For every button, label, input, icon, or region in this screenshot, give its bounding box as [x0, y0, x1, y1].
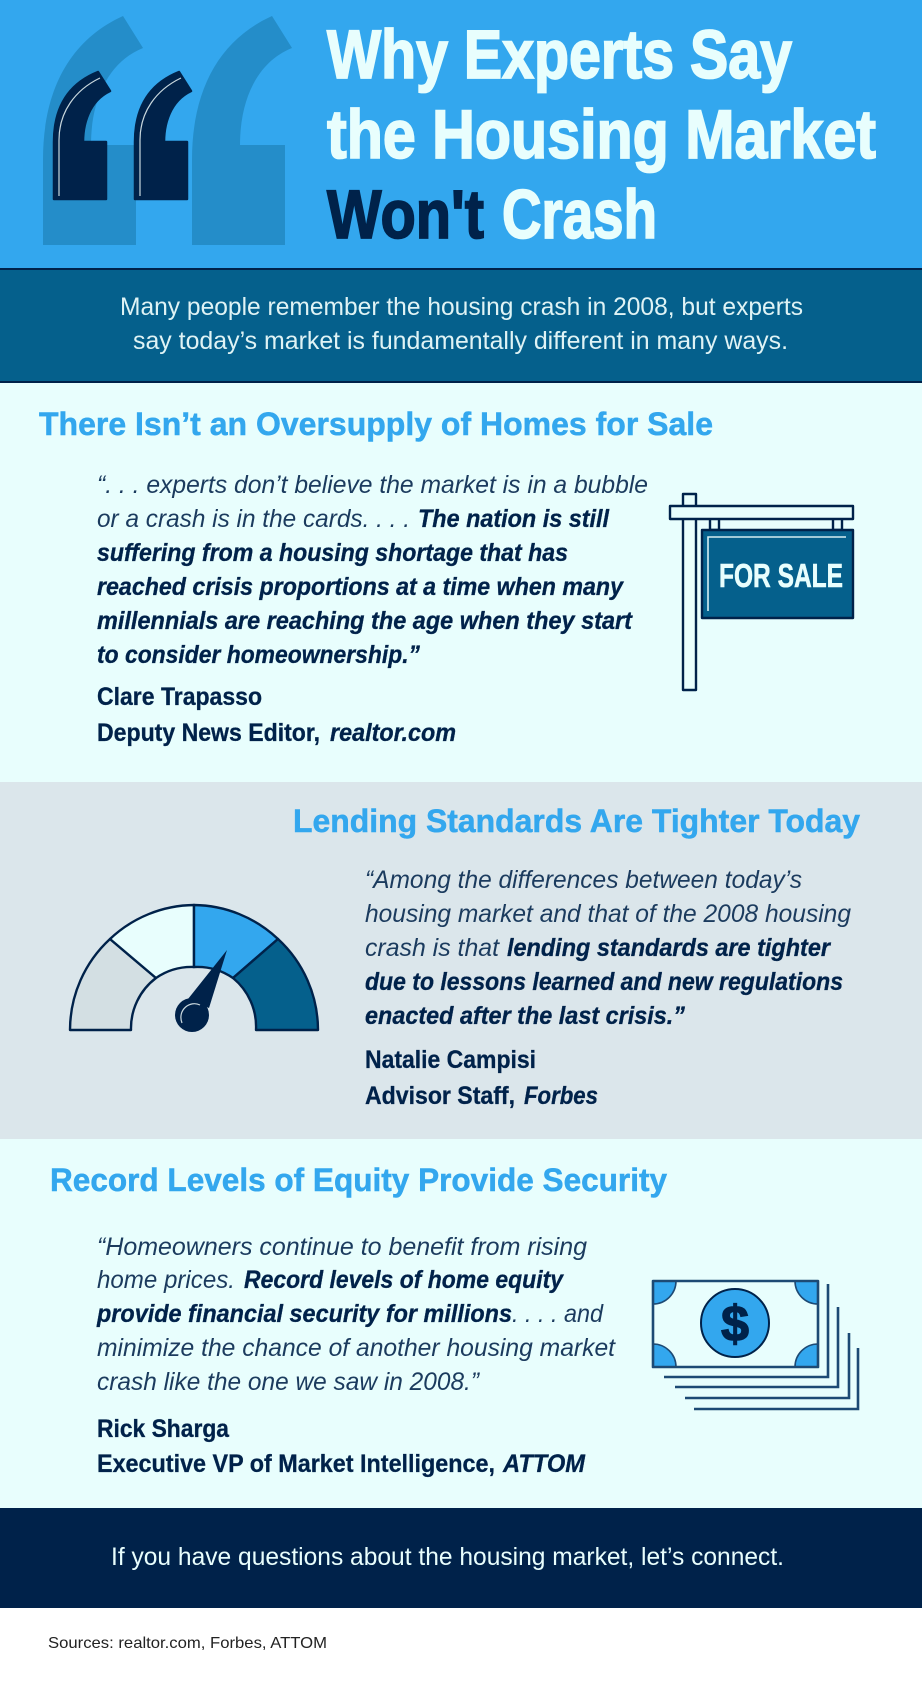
icon: gauge	[70, 905, 318, 1032]
quote: Clare Trapasso: to consider homeownership.”	[97, 641, 420, 669]
attribution: Clare Trapasso: realtor.com	[330, 719, 456, 747]
attribution: Natalie Campisi	[365, 1046, 598, 1110]
intro text	[120, 293, 803, 355]
title	[327, 16, 876, 253]
quote: Clare Trapasso: millennials are reaching the age when they start	[97, 607, 634, 635]
attribution: Natalie Campisi: Forbes	[524, 1082, 598, 1110]
icon: stack of money	[653, 1281, 858, 1409]
quote: Clare Trapasso	[97, 471, 648, 669]
attribution: Clare Trapasso: Deputy News Editor,	[97, 719, 320, 747]
attribution: Natalie Campisi: Advisor Staff,	[365, 1082, 515, 1110]
quote: Natalie Campisi: lending standards are tighter	[507, 934, 831, 962]
panel: footer call to action	[0, 1508, 922, 1608]
title: Crash	[502, 176, 657, 253]
intro text: say today’s market is fundamentally different in many ways.	[133, 327, 788, 355]
panel: intro band	[0, 268, 922, 383]
attribution: Rick Sharga: Rick Sharga	[97, 1415, 230, 1443]
quote: Clare Trapasso: or a crash is in the cards. . . .	[97, 505, 410, 533]
title: Won't	[327, 176, 484, 253]
quote: Natalie Campisi: enacted after the last crisis.”	[365, 1002, 685, 1030]
quote: Natalie Campisi: due to lessons learned and new regulations	[365, 968, 843, 996]
attribution: Rick Sharga: Executive VP of Market Intelligence,	[97, 1450, 495, 1478]
quote: Natalie Campisi: crash is that	[365, 934, 500, 962]
attribution: Clare Trapasso	[97, 683, 456, 747]
icon: for sale sign: FOR SALE	[719, 557, 843, 594]
quote: Rick Sharga: home prices.	[97, 1266, 235, 1294]
quote: Clare Trapasso: reached crisis proportions at a time when many	[97, 573, 624, 601]
quote: Clare Trapasso: The nation is still	[418, 505, 610, 533]
quote: Rick Sharga: . . . . and	[512, 1300, 604, 1328]
heading: lending standards: Lending Standards Are Tighter Today	[293, 803, 860, 839]
heading: oversupply: There Isn’t an Oversupply of Homes for Sale	[39, 406, 713, 442]
quote: Rick Sharga: Record levels of home equity	[244, 1266, 564, 1294]
quote: Rick Sharga: “Homeowners continue to benefit from rising	[97, 1233, 587, 1261]
panel: equity section	[0, 1139, 922, 1508]
panel: oversupply section	[0, 383, 922, 782]
quote: Natalie Campisi	[365, 866, 851, 1030]
quote: Clare Trapasso: “. . . experts don’t believe the market is in a bubble	[97, 471, 648, 499]
quote: Natalie Campisi: “Among the differences between today’s	[365, 866, 802, 894]
quote: Natalie Campisi: housing market and that of the 2008 housing	[365, 900, 851, 928]
panel: lending standards section	[0, 782, 922, 1139]
attribution: Clare Trapasso: Clare Trapasso	[97, 683, 262, 711]
quote: Rick Sharga	[96, 1233, 616, 1396]
quote: Clare Trapasso: suffering from a housing shortage that has	[97, 539, 568, 567]
title: Why Experts Say	[327, 16, 792, 93]
panel: header	[0, 0, 922, 268]
quote: Rick Sharga: minimize the chance of another housing market	[97, 1334, 616, 1362]
icon: large background quotation marks	[43, 16, 292, 245]
call to action text: If you have questions about the housing market, let’s connect.	[111, 1543, 784, 1571]
icon: for sale sign	[670, 494, 853, 690]
intro text: Many people remember the housing crash in 2008, but experts	[120, 293, 803, 321]
icon: dark quotation marks	[54, 72, 191, 199]
quote: Rick Sharga: provide financial security for millions	[96, 1300, 512, 1328]
heading: equity: Record Levels of Equity Provide Security	[50, 1162, 667, 1198]
icon: stack of money: $	[721, 1296, 749, 1352]
attribution: Natalie Campisi: Natalie Campisi	[365, 1046, 536, 1074]
attribution: Rick Sharga	[97, 1415, 586, 1478]
quote: Rick Sharga: crash like the one we saw in 2008.”	[97, 1368, 481, 1396]
sources: Sources: realtor.com, Forbes, ATTOM	[48, 1635, 327, 1652]
attribution: Rick Sharga: ATTOM	[502, 1450, 586, 1478]
